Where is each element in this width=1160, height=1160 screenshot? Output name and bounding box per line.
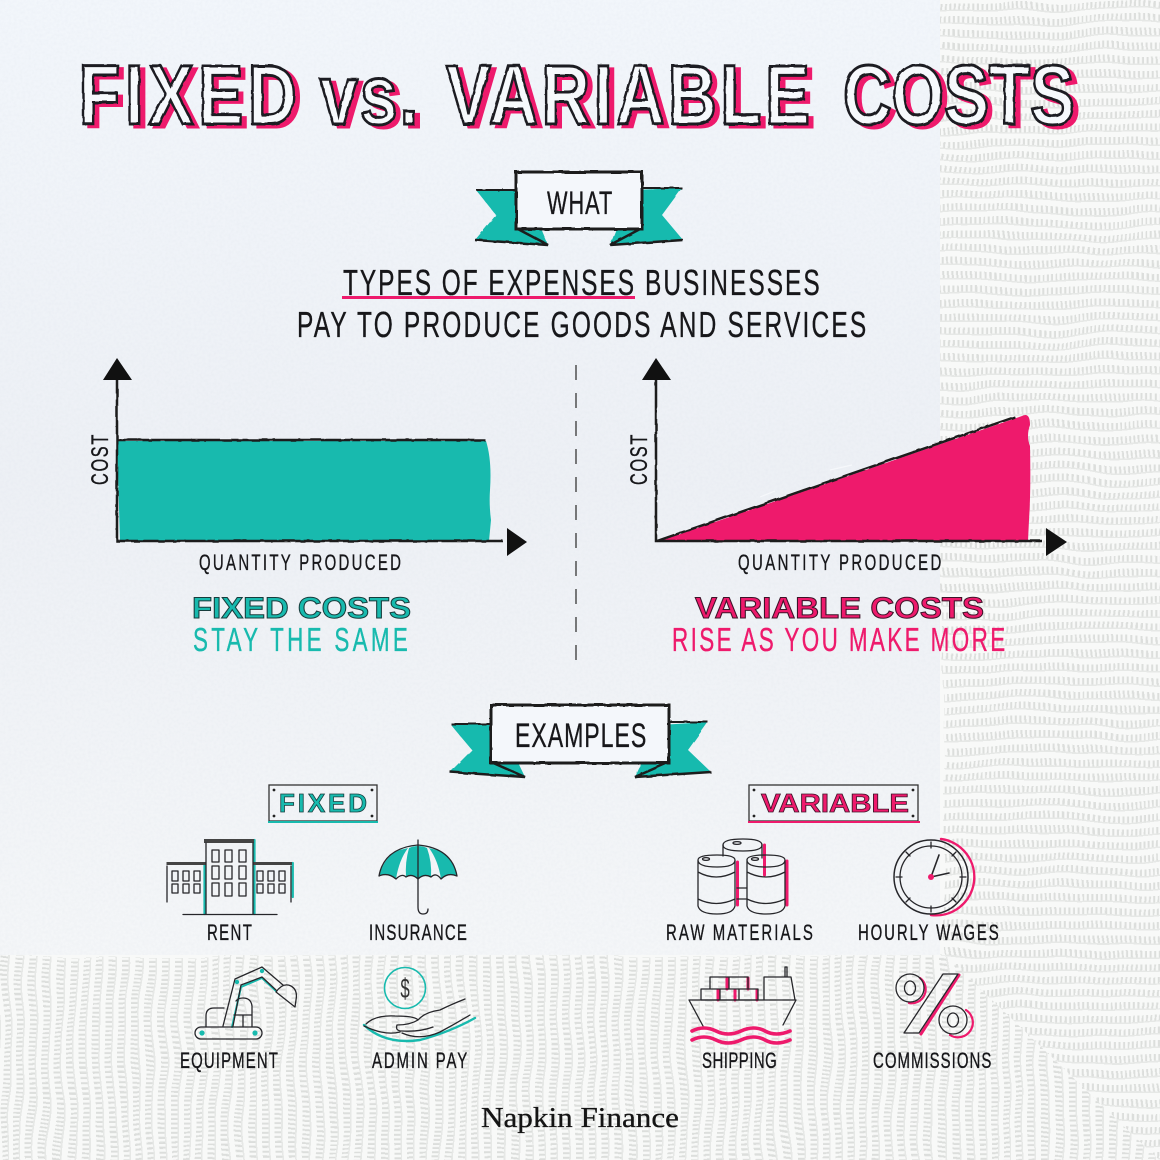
icon: cargo ship (689, 967, 796, 1043)
label: commissions: COMMISSIONS (873, 1048, 991, 1073)
title: vs. (325, 52, 423, 146)
icon: hand with dollar coin (364, 968, 475, 1041)
tag: fixed (268, 785, 378, 822)
chart: variable costs: QUANTITY PRODUCED (738, 550, 941, 575)
caption: fixed costs (192, 592, 411, 658)
title: vs. (320, 49, 418, 143)
icon: excavator (195, 967, 296, 1039)
label: admin pay: ADMIN PAY (372, 1048, 468, 1073)
banner: what (475, 172, 683, 245)
label: hourly wages: HOURLY WAGES (858, 920, 999, 945)
label: insurance: INSURANCE (369, 920, 467, 945)
title: VARIABLE (446, 49, 810, 143)
chart: variable costs (626, 358, 1067, 575)
label: shipping: SHIPPING (702, 1048, 777, 1073)
chart: fixed costs: COST (87, 434, 114, 485)
title (79, 49, 1080, 146)
icon: barrels (698, 839, 787, 914)
banner: examples (450, 705, 711, 777)
caption: variable costs (672, 592, 1005, 658)
label: raw materials: RAW MATERIALS (666, 920, 813, 945)
chart: fixed costs: QUANTITY PRODUCED (199, 550, 401, 575)
icon: umbrella (379, 840, 457, 914)
title: VARIABLE (451, 52, 815, 146)
title: COSTS (843, 49, 1075, 143)
tag: variable: VARIABLE (761, 788, 909, 818)
banner: examples: EXAMPLES (515, 718, 646, 755)
icon: percent (896, 974, 973, 1037)
definition text: PAY TO PRODUCE GOODS AND SERVICES (297, 304, 866, 345)
label: rent: RENT (207, 920, 252, 945)
caption: fixed costs: FIXED COSTS (192, 592, 411, 625)
definition text (297, 262, 866, 345)
tag: fixed: FIXED (279, 788, 367, 818)
caption: variable costs: RISE AS YOU MAKE MORE (672, 621, 1005, 658)
chart: variable costs: COST (626, 434, 653, 485)
caption: fixed costs: STAY THE SAME (193, 621, 408, 658)
label: equipment: EQUIPMENT (180, 1048, 278, 1073)
title: FIXED (79, 49, 297, 143)
chart: fixed costs (87, 358, 527, 575)
banner: what: WHAT (547, 185, 613, 221)
caption: variable costs: VARIABLE COSTS (695, 592, 984, 625)
title: FIXED (84, 52, 302, 146)
brand footer: Napkin Finance (481, 1103, 679, 1134)
divider (575, 365, 577, 660)
definition text: TYPES OF EXPENSES (343, 262, 634, 303)
title: COSTS (848, 52, 1080, 146)
tag: variable (748, 785, 920, 822)
definition text: BUSINESSES (645, 262, 820, 303)
icon: clock (894, 839, 974, 915)
icon: hand with dollar coin: $ (400, 973, 410, 1004)
icon: building (166, 839, 293, 914)
